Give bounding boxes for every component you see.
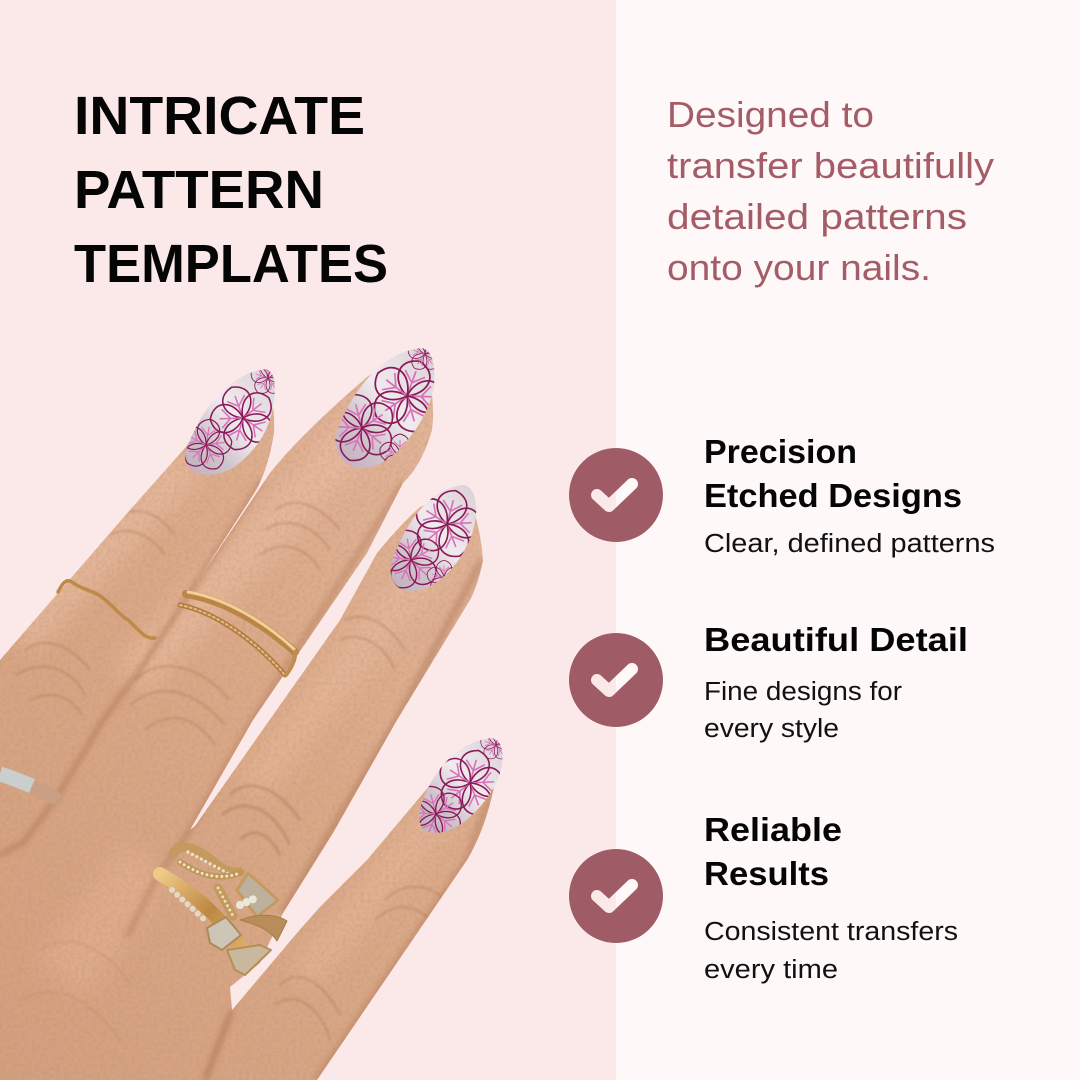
ring: diamond cluster set	[160, 847, 287, 975]
icon: check badge	[569, 849, 663, 943]
feature text: Results	[704, 855, 829, 892]
feature: beautiful detail	[569, 621, 968, 743]
feature text: Reliable	[704, 811, 842, 848]
hand silhouette	[0, 359, 495, 1080]
ring: silver band	[0, 774, 58, 800]
intro text	[667, 94, 994, 288]
nail: ring finger	[390, 485, 476, 591]
skin grain	[0, 390, 484, 1080]
intro text: detailed patterns	[667, 196, 967, 237]
photo: hand with patterned nails	[0, 336, 514, 1080]
icon: check badge	[569, 633, 663, 727]
nail: middle finger	[335, 348, 434, 468]
nail: index finger	[419, 738, 503, 833]
panel: right pale background	[616, 0, 1080, 1080]
feature text: Consistent transfers	[704, 918, 958, 946]
feature text: every style	[704, 715, 839, 743]
icon: check badge	[569, 448, 663, 542]
feature text: Clear, defined patterns	[704, 530, 995, 558]
feature: precision etched designs	[569, 433, 995, 558]
feature: reliable results	[569, 811, 958, 984]
panel: left pink background	[0, 0, 616, 1080]
feature text	[704, 621, 968, 743]
ring: wavy gold band	[58, 581, 155, 638]
title	[74, 86, 388, 294]
nail: pinky	[185, 369, 275, 475]
title: INTRICATE	[74, 86, 365, 146]
intro text: Designed to	[667, 94, 874, 135]
intro text: transfer beautifully	[667, 145, 994, 186]
feature text: Fine designs for	[704, 678, 903, 706]
feature text: Etched Designs	[704, 477, 962, 514]
ring: stacked gold bands	[180, 592, 295, 675]
feature text	[704, 433, 995, 558]
intro text: onto your nails.	[667, 247, 931, 288]
title: PATTERN	[74, 160, 324, 220]
feature text: Precision	[704, 433, 857, 470]
feature text: Beautiful Detail	[704, 621, 968, 658]
knuckle wrinkles	[15, 503, 445, 1040]
feature text: every time	[704, 956, 838, 984]
skin shading	[0, 350, 510, 1080]
title: TEMPLATES	[74, 234, 388, 294]
feature text	[704, 811, 958, 984]
